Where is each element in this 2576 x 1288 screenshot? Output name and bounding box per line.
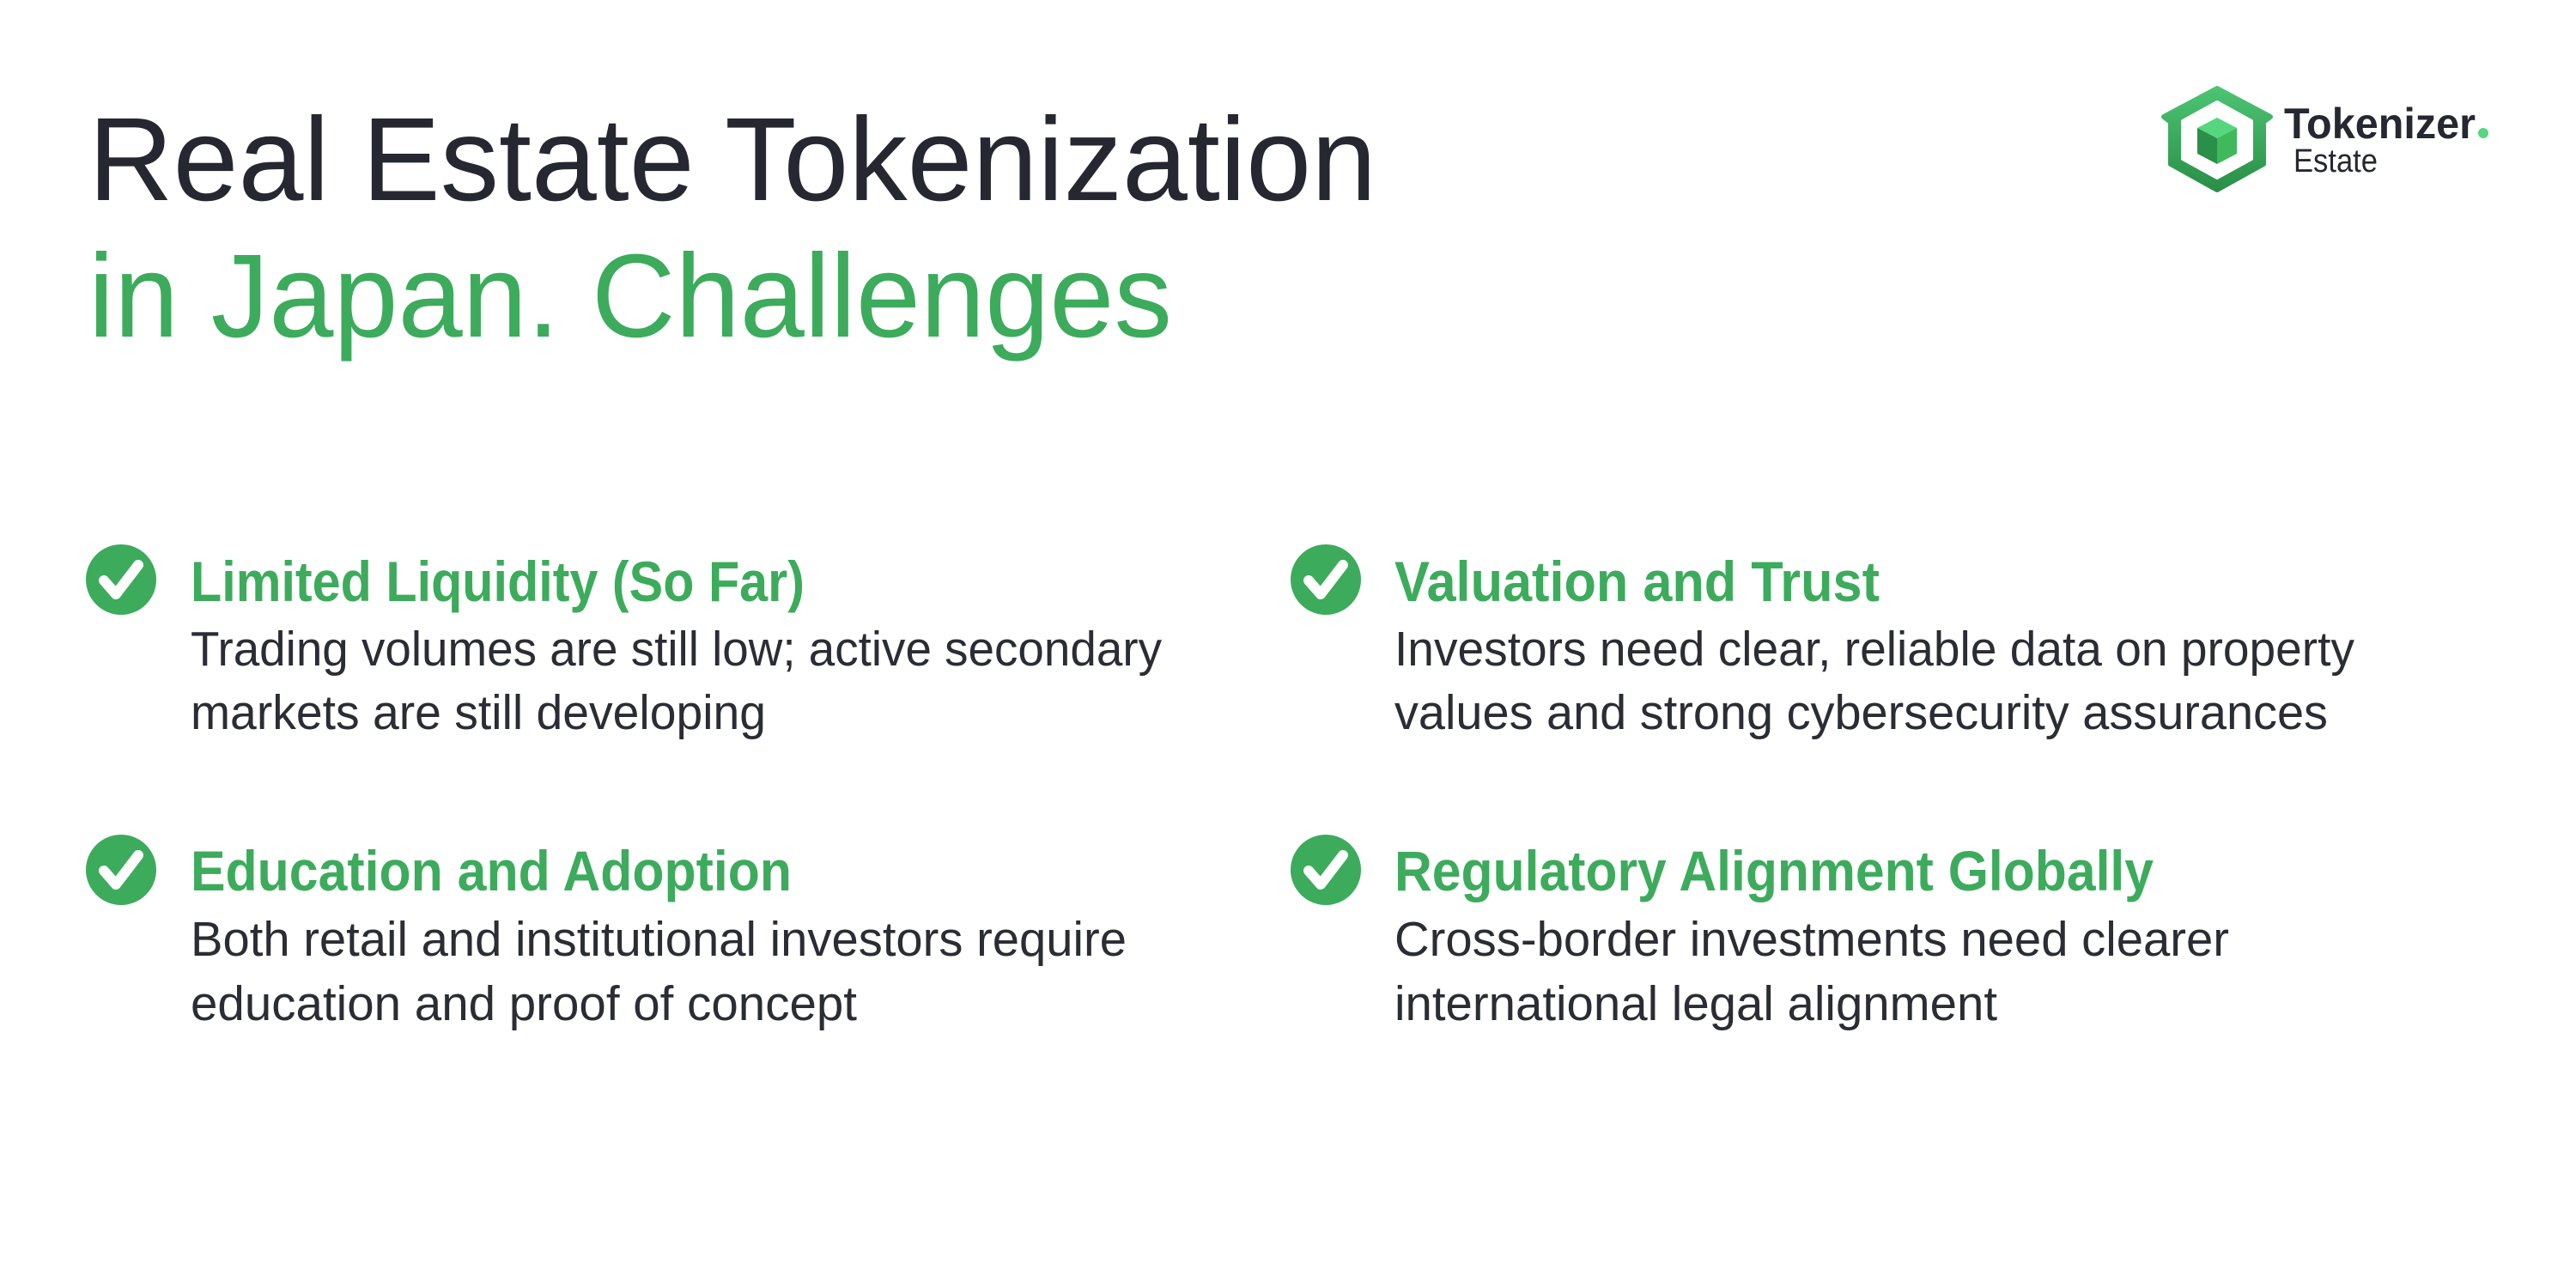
item: regulatory alignment xyxy=(1291,835,2229,1031)
title xyxy=(88,94,1376,362)
title: Real Estate Tokenization xyxy=(88,94,1376,226)
icon: check xyxy=(1291,835,1361,905)
item: education and adoption: education and proof of concept xyxy=(191,976,857,1031)
item: limited liquidity: markets are still developing xyxy=(191,685,766,740)
icon: check xyxy=(1291,544,1361,615)
item: valuation and trust: Valuation and Trust xyxy=(1394,550,1880,613)
logo: Tokenizer xyxy=(2284,100,2476,148)
icon: house xyxy=(2164,88,2270,190)
icon: check xyxy=(86,544,156,615)
item: valuation and trust: Investors need clear, reliable data on property xyxy=(1394,622,2354,677)
item: education and adoption xyxy=(86,835,1127,1031)
logo: Estate xyxy=(2293,143,2378,179)
item: regulatory alignment: Cross-border investments need clearer xyxy=(1394,912,2229,967)
item: education and adoption: Both retail and institutional investors require xyxy=(191,912,1127,967)
item: regulatory alignment: Regulatory Alignment Globally xyxy=(1394,839,2154,902)
item: regulatory alignment: international legal alignment xyxy=(1394,976,1997,1031)
icon: check xyxy=(86,835,156,905)
item: limited liquidity xyxy=(86,544,1162,740)
item: valuation and trust: values and strong cybersecurity assurances xyxy=(1394,685,2328,740)
item: limited liquidity: Trading volumes are still low; active secondary xyxy=(191,622,1162,677)
item: education and adoption: Education and Adoption xyxy=(191,839,792,902)
title: in Japan. Challenges xyxy=(88,230,1172,362)
item: valuation and trust xyxy=(1291,544,2354,740)
logo xyxy=(2164,88,2488,190)
item: limited liquidity: Limited Liquidity (So Far) xyxy=(191,550,805,613)
